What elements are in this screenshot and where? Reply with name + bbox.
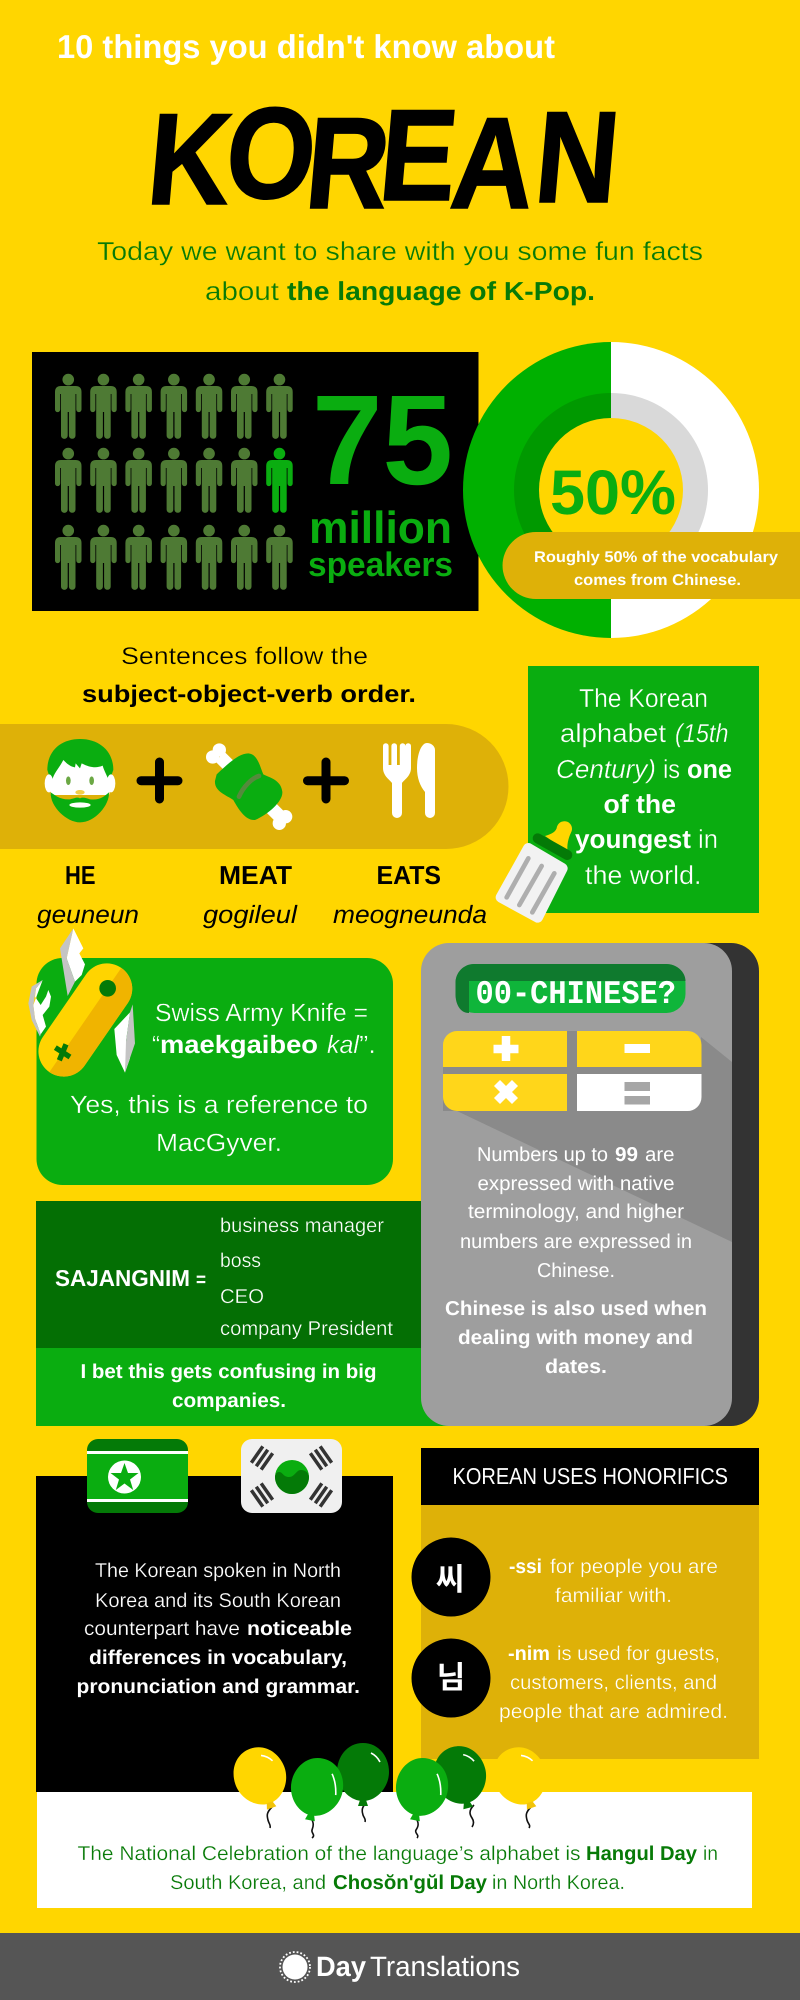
panel: honorifics (412, 1448, 759, 1759)
calculator text: dates. (545, 1356, 607, 1378)
panel: sajangnim: company President (220, 1318, 393, 1340)
icon: bearded man (45, 739, 115, 822)
panel: youngest alphabet: youngest (575, 824, 691, 854)
panel: youngest alphabet: in (698, 824, 718, 854)
calculator buttons (443, 1031, 702, 1111)
icon: south korea flag (241, 1439, 342, 1513)
labels: sentence words: MEAT (219, 860, 292, 890)
number 75: 75 (312, 369, 453, 512)
panel: national celebration: in (703, 1843, 718, 1865)
footer (0, 1933, 800, 2000)
text: maekgaibeo kal: “ (152, 1031, 160, 1059)
panel: youngest alphabet: (15th (675, 718, 728, 748)
panel: national celebration: The National Celebration of the language’s alphabet is (78, 1843, 580, 1865)
calculator display: 00-CHINESE? (476, 976, 676, 1013)
panel: national celebration: Hangul Day (586, 1843, 698, 1865)
panel: north and south korea (36, 1439, 393, 1792)
calculator text: Numbers up to (477, 1144, 608, 1166)
icon: fork and knife (383, 743, 435, 818)
calculator text: 99 (615, 1144, 638, 1166)
panel: sajangnim (36, 1201, 451, 1426)
icon: plus (308, 762, 344, 799)
heading: sentence order: subject-object-verb order. (82, 681, 416, 708)
intro text (97, 236, 703, 306)
icon: plus (141, 762, 178, 799)
panel: national celebration: in North Korea. (492, 1872, 625, 1894)
icon: balloons (226, 1740, 556, 1838)
text: dialect differences: counterpart have (84, 1618, 240, 1640)
header: honorifics: KOREAN USES HONORIFICS (452, 1463, 728, 1489)
heading: sentence order: Sentences follow the (121, 643, 368, 670)
text: honorific explanations: for people you are (550, 1556, 718, 1578)
panel: sajangnim: CEO (220, 1286, 264, 1308)
icon: meat (206, 743, 292, 830)
icon: baby bottle (501, 821, 572, 917)
text: maekgaibeo kal: Yes, this is a reference to (70, 1091, 368, 1119)
text: honorific explanations: people that are admired. (499, 1701, 728, 1723)
intro text: Today we want to share with you some fun facts (97, 236, 703, 266)
calculator text: are (645, 1144, 674, 1166)
speakers: speakers (308, 546, 453, 584)
panel: youngest alphabet: alphabet (560, 718, 667, 748)
text: maekgaibeo kal: kal (327, 1031, 360, 1059)
labels: sentence words (37, 860, 487, 929)
panel: youngest alphabet: of the (604, 789, 676, 819)
labels: sentence words: meogneunda (333, 901, 487, 929)
logo text: Translations (370, 1951, 520, 1982)
panel: sajangnim: I bet this gets confusing in big (80, 1361, 376, 1383)
panel: sajangnim: boss (220, 1250, 261, 1272)
logo text: Day (316, 1951, 366, 1982)
labels: sentence words: gogileul (203, 901, 299, 929)
panel: 75 million speakers (32, 352, 478, 611)
text: maekgaibeo kal (70, 999, 376, 1157)
text: dialect differences: pronunciation and grammar. (76, 1676, 360, 1698)
icon: swiss army knife (27, 928, 144, 1088)
panel: youngest alphabet: the world. (585, 860, 702, 890)
labels: sentence words: geuneun (37, 901, 139, 929)
title: KOREAN: KOREAN (142, 80, 626, 236)
calculator text: Chinese. (537, 1260, 615, 1282)
icon: ssi: 씨 (436, 1562, 464, 1597)
50% label: 50% (550, 458, 676, 528)
text: maekgaibeo kal: ”. (359, 1031, 376, 1059)
text: honorific explanations: -nim (508, 1643, 550, 1665)
panel: youngest alphabet: one (687, 754, 732, 784)
labels: sentence words: EATS (376, 860, 441, 890)
panel: sajangnim: SAJANGNIM (55, 1265, 190, 1291)
icon: north korea flag (87, 1439, 188, 1513)
icon: nim: 님 (437, 1660, 465, 1695)
panel: sajangnim: business manager (220, 1215, 384, 1237)
icon: day translations logo (280, 1952, 310, 1982)
callout: vocabulary: Roughly 50% of the vocabulary (534, 549, 778, 566)
calculator display (456, 964, 686, 1013)
labels: sentence words: HE (65, 860, 96, 890)
intro text: about (205, 276, 280, 306)
icon: nim (412, 1638, 490, 1718)
panel: national celebration (37, 1792, 752, 1908)
text: maekgaibeo kal: Swiss Army Knife = (155, 999, 368, 1027)
panel: Swiss Army Knife (27, 928, 393, 1185)
panel: youngest alphabet: The Korean (579, 683, 708, 713)
calculator text: expressed with native (478, 1173, 674, 1195)
calculator text: dealing with money and (458, 1327, 693, 1349)
calculator text (445, 1144, 707, 1378)
panel: sajangnim: companies. (172, 1390, 286, 1412)
calculator text: numbers are expressed in (460, 1231, 692, 1253)
panel: calculator (421, 943, 759, 1426)
panel: national celebration: Chosŏn'gŭl Day (333, 1872, 488, 1894)
text: honorific explanations (499, 1556, 728, 1723)
panel: youngest alphabet: Century) (556, 754, 656, 784)
callout: vocabulary (503, 532, 800, 599)
people pictogram (55, 374, 293, 590)
text: dialect differences (76, 1560, 360, 1698)
calculator text: terminology, and higher (468, 1201, 684, 1223)
calculator text: Chinese is also used when (445, 1298, 707, 1320)
panel: youngest alphabet: is (663, 754, 680, 784)
text: honorific explanations: customers, clients, and (510, 1672, 717, 1694)
icon: ssi (412, 1538, 490, 1616)
donut chart: 50% (463, 342, 759, 638)
text: dialect differences: The Korean spoken in North (95, 1560, 341, 1582)
panel: sentence band (0, 724, 508, 849)
text: dialect differences: Korea and its South Korean (95, 1590, 341, 1612)
panel: national celebration: South Korea, and (170, 1872, 326, 1894)
callout: vocabulary: comes from Chinese. (574, 572, 741, 589)
intro text: the language of K-Pop. (287, 276, 595, 306)
text: dialect differences: noticeable (247, 1618, 352, 1640)
panel: sajangnim: = (196, 1269, 206, 1291)
text: maekgaibeo kal: MacGyver. (156, 1129, 282, 1157)
text: honorific explanations: -ssi (509, 1556, 542, 1578)
text: honorific explanations: familiar with. (555, 1585, 672, 1607)
header: honorifics (421, 1448, 759, 1505)
text: honorific explanations: is used for guests, (557, 1643, 720, 1665)
heading: sentence order (82, 643, 416, 708)
million: million (309, 502, 452, 553)
text: maekgaibeo kal: maekgaibeo (160, 1031, 318, 1059)
panel: youngest alphabet (501, 666, 759, 917)
title: 10 things: 10 things you didn't know about (57, 28, 555, 65)
text: dialect differences: differences in vocabulary, (89, 1647, 347, 1669)
